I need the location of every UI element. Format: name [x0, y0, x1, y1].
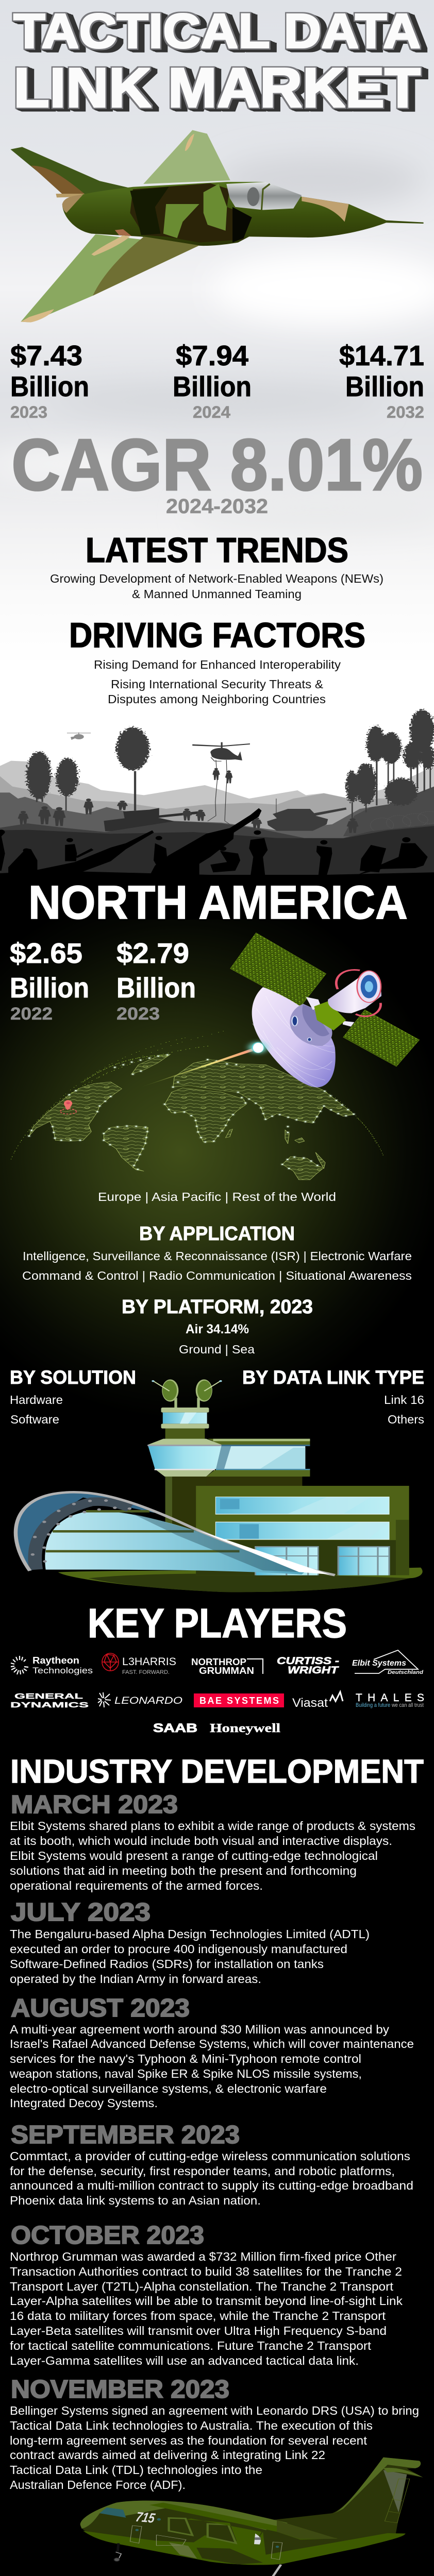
logo: Northrop Grumman: GRUMMAN — [199, 1666, 254, 1676]
development: November 2023: Tactical Data Link technologies to Australia. The execution of this — [10, 2419, 373, 2432]
market value 2024: 2024 — [193, 403, 230, 421]
logo: Leonardo — [98, 1692, 182, 1707]
industry development heading: INDUSTRY DEVELOPMENT — [10, 1753, 424, 1790]
development: August 2023: A multi-year agreement worth around $30 Million was announced by — [10, 2023, 390, 2036]
development: October 2023 — [10, 2222, 403, 2367]
logo: General Dynamics: GENERAL — [14, 1692, 83, 1701]
logo: BAE Systems: BAE SYSTEMS — [199, 1696, 279, 1706]
landing gear — [114, 2543, 281, 2576]
logo: Honeywell: Honeywell — [210, 1722, 280, 1735]
development: November 2023: Bellinger Systems signed an agreement with Leonardo DRS (USA) to bring — [10, 2404, 419, 2417]
development: October 2023: Layer-Beta satellites will transmit over Ultra High Frequency S-band — [10, 2324, 387, 2337]
logo: L3Harris: L3HARRIS — [122, 1656, 176, 1668]
by data link type column: Others — [388, 1413, 424, 1426]
development: March 2023: Elbit Systems shared plans to exhibit a wide range of products & systems — [10, 1819, 415, 1833]
North America value 2022: Billion — [10, 972, 89, 1004]
development: October 2023: OCTOBER 2023 — [11, 2222, 204, 2249]
dark section background — [0, 875, 434, 2576]
by platform values: Air 34.14% — [186, 1322, 249, 1336]
logo: Viasat — [292, 1692, 343, 1710]
illustration: battlefield silhouette scene — [0, 709, 434, 881]
title: LINK MARKET — [13, 57, 421, 120]
CAGR period: 2024-2032 — [166, 495, 268, 518]
illustration: camouflaged fighter jet — [10, 130, 424, 323]
signal beam — [138, 1048, 256, 1088]
market value 2032 — [339, 340, 424, 421]
North America value 2022: $2.65 — [10, 937, 82, 969]
by solution column: Software — [10, 1413, 59, 1426]
market value 2032: 2032 — [387, 403, 424, 421]
logo: L3Harris: FAST. FORWARD. — [122, 1669, 170, 1675]
antennas — [152, 1379, 222, 1408]
market value 2023: Billion — [10, 370, 89, 402]
market value 2024: $7.94 — [176, 340, 248, 371]
ground — [58, 1568, 423, 1592]
latest trends text — [50, 572, 383, 601]
small helicopter — [67, 733, 91, 740]
driving factors text: Rising Demand for Enhanced Interoperability — [94, 658, 341, 671]
North America value 2023 — [116, 937, 196, 1024]
development: October 2023: for tactical satellite communications. Future Tranche 2 Transport — [10, 2339, 372, 2352]
logo: Northrop Grumman: NORTHROP — [191, 1657, 246, 1667]
location pin — [60, 1100, 76, 1114]
development: March 2023: solutions that aid in meeting both the present and forthcoming — [10, 1864, 357, 1877]
development: August 2023: weapon stations, naval Spike ER & Spike NLOS missile systems, — [9, 2067, 362, 2080]
latest trends text: & Manned Unmanned Teaming — [132, 587, 302, 601]
light sky background — [0, 0, 434, 876]
logo: Curtiss-Wright: WRIGHT — [288, 1665, 339, 1676]
logo: General Dynamics: DYNAMICS — [10, 1701, 89, 1709]
by solution column: BY SOLUTION — [10, 1367, 136, 1388]
tanks — [104, 799, 346, 831]
tail number: 715 — [135, 2509, 157, 2526]
latest trends text: Growing Development of Network-Enabled Weapons (NEWs) — [50, 572, 383, 585]
development: July 2023: operated by the Indian Army in forward areas. — [10, 1972, 261, 1986]
market value 2023: 2023 — [10, 403, 47, 421]
title — [13, 4, 421, 120]
logo: Raytheon Technologies: Technologies — [32, 1666, 93, 1675]
logo: Northrop Grumman — [191, 1657, 263, 1676]
North America value 2023: 2023 — [116, 1004, 160, 1024]
by solution column — [10, 1367, 136, 1426]
logo: Leonardo: LEONARDO — [114, 1696, 182, 1706]
development: March 2023: MARCH 2023 — [11, 1791, 178, 1819]
development: August 2023: AUGUST 2023 — [11, 1994, 190, 2022]
by application list: Intelligence, Surveillance & Reconnaissance (ISR) | Electronic Warfare — [23, 1249, 412, 1263]
development: August 2023: Israel's Rafael Advanced Defense Systems, which will cover maintenance — [10, 2037, 414, 2050]
illustration: command centre building — [15, 1379, 423, 1592]
development: September 2023: Phoenix data link systems to an Asian nation. — [10, 2194, 261, 2207]
development: July 2023: The Bengaluru-based Alpha Design Technologies Limited (ADTL) — [10, 1927, 370, 1941]
market value 2032: $14.71 — [339, 340, 424, 371]
barbed wire — [371, 811, 434, 833]
development: July 2023 — [10, 1899, 370, 1986]
latest trends heading: LATEST TRENDS — [86, 531, 348, 570]
logo: Saab: SAAB — [153, 1721, 197, 1735]
development: August 2023: electro-optical surveillance systems, & electronic warfare — [10, 2082, 327, 2095]
development: October 2023: Transport Layer (T2TL)-Alpha constellation. The Tranche 2 Transport — [10, 2280, 394, 2293]
logo: L3Harris — [102, 1653, 176, 1675]
regions list: Europe | Asia Pacific | Rest of the World — [98, 1190, 336, 1204]
logo: Curtiss-Wright — [277, 1656, 339, 1676]
by solution column: Hardware — [10, 1393, 63, 1406]
development: November 2023 — [10, 2376, 419, 2492]
by application list — [22, 1249, 412, 1282]
logo: BAE Systems — [194, 1693, 284, 1707]
development: November 2023: contract awards aimed at delivering & integrating Link 22 — [10, 2448, 325, 2462]
by application list: Command & Control | Radio Communication | Situational Awareness — [22, 1269, 412, 1282]
region heading: North America: NORTH AMERICA — [28, 876, 408, 929]
logo: Viasat: Viasat — [292, 1696, 328, 1710]
development: November 2023: Australian Defence Force (ADF). — [10, 2478, 186, 2492]
North America value 2022 — [10, 937, 89, 1024]
logo: Elbit Systems: Deutschland — [388, 1670, 424, 1675]
development: September 2023 — [10, 2121, 413, 2207]
development: October 2023: Layer-Alpha satellites will be able to transmit beyond line-of-sight Link — [10, 2294, 403, 2308]
ridge soldiers — [18, 799, 359, 833]
development: September 2023: Commtact, a provider of cutting-edge wireless communication solutions — [10, 2149, 410, 2163]
logo: Elbit Systems — [352, 1650, 424, 1675]
glowing emitter — [249, 1042, 267, 1053]
logo: Thales: Building a future we can all trust — [356, 1702, 424, 1708]
development: March 2023: operational requirements of the armed forces. — [10, 1879, 263, 1892]
development: July 2023: JULY 2023 — [11, 1899, 151, 1926]
title: TACTICAL DATA — [13, 4, 421, 59]
curved glass hall — [15, 1492, 335, 1575]
development: March 2023: at its booth, which would include both visual and interactive displays. — [10, 1834, 392, 1848]
market value 2032: Billion — [345, 370, 424, 402]
by data link type column: BY DATA LINK TYPE — [242, 1367, 424, 1388]
North America value 2023: Billion — [116, 972, 196, 1004]
logo: General Dynamics — [10, 1692, 89, 1709]
by application heading: BY APPLICATION — [139, 1223, 295, 1245]
large helicopter with rappelling soldiers — [192, 742, 250, 824]
coastline lights — [29, 1055, 354, 1171]
by data link type column — [242, 1367, 424, 1426]
development: October 2023: 16 data to military forces from space, while the Tranche 2 Transport — [10, 2309, 386, 2323]
market value 2024 — [173, 340, 252, 421]
development: July 2023: executed an order to procure 400 indigenously manufactured — [10, 1942, 347, 1956]
development: October 2023: Transaction Authorities contract to build 38 satellites for the Tranche 2 — [10, 2265, 402, 2278]
by data link type column: Link 16 — [384, 1393, 424, 1406]
illustration: military transport aircraft — [80, 2458, 423, 2576]
North America value 2023: $2.79 — [116, 937, 189, 969]
office block — [196, 1486, 409, 1575]
driving factors text: Rising International Security Threats & — [111, 677, 323, 691]
by platform values — [179, 1322, 255, 1356]
development: September 2023: for the defense, security, first responder teams, and robotic platforms, — [10, 2164, 395, 2178]
satellite — [230, 933, 420, 1088]
development: March 2023: Elbit Systems would present a range of cutting-edge technological — [10, 1849, 378, 1862]
development: November 2023: long-term agreement serves as the foundation for several recent — [10, 2434, 368, 2447]
logo: Raytheon Technologies: Raytheon — [32, 1655, 79, 1666]
market value 2024: Billion — [173, 370, 252, 402]
by platform values: Ground | Sea — [179, 1343, 255, 1356]
logo: Thales: THALES — [356, 1692, 424, 1704]
logo: Curtiss-Wright: CURTISS - — [277, 1656, 339, 1667]
development: October 2023: Northrop Grumman was awarded a $732 Million firm-fixed price Other — [10, 2250, 396, 2263]
howitzers and crew — [0, 808, 434, 881]
development: March 2023 — [10, 1791, 415, 1892]
development: November 2023: NOVEMBER 2023 — [11, 2376, 229, 2403]
market value 2023 — [10, 340, 89, 421]
driving factors text: Disputes among Neighboring Countries — [108, 692, 326, 706]
key players heading: KEY PLAYERS — [88, 1600, 347, 1646]
logo: Elbit Systems: Elbit Systems — [352, 1659, 406, 1668]
development: September 2023: announced a multi-million contract to supply its cutting-edge broadband — [10, 2179, 413, 2192]
particle arcs — [11, 1030, 383, 1159]
development: November 2023: Tactical Data Link (TDL) technologies into the — [10, 2463, 262, 2477]
development: August 2023: Integrated Decoy Systems. — [10, 2096, 158, 2110]
development: August 2023: services for the navy's Typhoon & Mini-Typhoon remote control — [10, 2052, 361, 2065]
continents — [29, 1055, 354, 1180]
driving factors heading: DRIVING FACTORS — [69, 616, 365, 655]
driving factors text — [94, 658, 341, 706]
development: October 2023: Layer-Gamma satellites will use an advanced tactical data link. — [10, 2354, 359, 2367]
development: September 2023: SEPTEMBER 2023 — [11, 2121, 240, 2149]
by platform heading: BY PLATFORM, 2023 — [122, 1296, 313, 1318]
North America value 2022: 2022 — [10, 1004, 53, 1024]
background trees — [27, 709, 434, 818]
market value 2023: $7.43 — [10, 340, 82, 371]
control tower — [147, 1408, 310, 1545]
development: July 2023: Software-Defined Radios (SDRs) for installation on tanks — [10, 1957, 324, 1971]
development: August 2023 — [9, 1994, 414, 2110]
logo: Raytheon Technologies — [11, 1655, 93, 1675]
illustration: glowing world map — [11, 933, 420, 1180]
